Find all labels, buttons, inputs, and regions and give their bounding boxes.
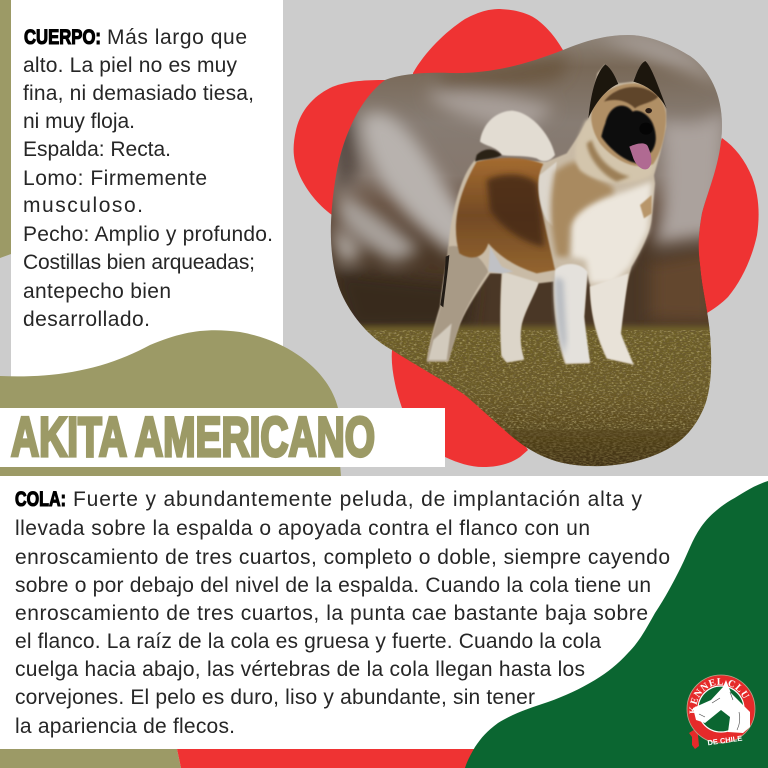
logo green center [698, 686, 744, 732]
text block: cola [15, 488, 670, 738]
text block: cuerpo: Espalda: Recta. [23, 138, 171, 161]
text block: cola: enroscamiento de tres cuartos, completo o doble, siempre cayendo [15, 546, 670, 569]
text block: cuerpo: ni muy floja. [23, 110, 135, 133]
hind leg dark edge [440, 255, 449, 307]
red blob behind photo [294, 9, 759, 467]
olive wave shape [0, 330, 341, 476]
hind leg far [501, 272, 538, 362]
tongue [629, 143, 651, 169]
logo bottom text: DE CHILE [707, 734, 743, 747]
text block: cola: corvejones. El pelo es duro, liso y abundante, sin tener [15, 686, 535, 709]
dark saddle patch [487, 175, 544, 247]
text block: cuerpo: alto. La piel no es muy [23, 54, 238, 77]
ears [588, 64, 618, 118]
second front leg white [590, 273, 633, 364]
photo: akita dog on grass [330, 35, 722, 466]
neck ruff [575, 118, 652, 182]
chest tan patch [640, 195, 652, 218]
green corner shape [465, 481, 768, 768]
text block: cuerpo: Más largo que [107, 26, 247, 49]
logo dog head [693, 680, 750, 733]
nose [642, 123, 650, 134]
text block: cuerpo: desarrollado. [23, 308, 150, 331]
text block: cuerpo: musculoso. [23, 194, 143, 217]
hind leg near [427, 246, 488, 361]
title text: AKITA AMERICANO [11, 405, 375, 468]
bottom red strip [177, 749, 480, 768]
photo background [330, 35, 722, 466]
head base [591, 83, 666, 166]
background: gray upper area [0, 0, 768, 476]
dog body [427, 61, 666, 365]
dog white chest [572, 182, 652, 283]
logo head details [699, 692, 740, 730]
text block: cola: COLA: [15, 488, 66, 511]
tan shoulder [551, 162, 614, 257]
panel: cuerpo white box [11, 0, 283, 380]
text block: cola: Fuerte y abundantemente peluda, de implantación alta y [73, 488, 642, 511]
text block: cuerpo [23, 26, 273, 331]
text block: cola: sobre o por debajo del nivel de la espalda. Cuando la cola tiene un [15, 574, 651, 597]
eye [645, 108, 652, 113]
text block: cuerpo: fina, ni demasiado tiesa, [23, 82, 254, 105]
dog head [588, 61, 667, 169]
black mask [601, 106, 656, 163]
brown saddle [456, 158, 555, 273]
logo red leash [689, 726, 702, 749]
text block: cola: la apariencia de flecos. [15, 715, 235, 738]
text block: cola: enroscamiento de tres cuartos, la punta cae bastante baja sobre [15, 602, 648, 625]
front leg shadow [555, 277, 567, 357]
logo red ring [687, 675, 755, 743]
olive left strip [0, 0, 11, 258]
text block: cola: el flanco. La raíz de la cola es gruesa y fuerte. Cuando la cola [15, 630, 601, 653]
text block: cuerpo: Lomo: Firmemente [23, 167, 207, 190]
bottom olive strip [0, 749, 181, 768]
hind paw [428, 323, 452, 360]
logo top text: KENNEL CLUB [690, 678, 750, 714]
text block: cuerpo: CUERPO: [24, 26, 101, 49]
text block: cola: llevada sobre la espalda o apoyada contra el flanco con un [15, 517, 590, 540]
front leg white [555, 264, 590, 363]
text block: cuerpo: Costillas bien arqueadas; [23, 251, 255, 274]
belly shadow [488, 247, 513, 273]
dog [427, 61, 667, 365]
tail underside [475, 149, 502, 162]
forehead [604, 87, 658, 108]
text block: cola: cuelga hacia abajo, las vértebras de la cola llegan hasta los [15, 658, 585, 681]
panel: lower white area [0, 476, 768, 768]
ruff shading [587, 140, 630, 182]
title banner [0, 405, 445, 468]
tail [480, 111, 555, 161]
text block: cuerpo: Pecho: Amplio y profundo. [23, 223, 273, 246]
white shoulder stripe [539, 162, 557, 227]
text block: cuerpo: antepecho bien [23, 280, 171, 303]
